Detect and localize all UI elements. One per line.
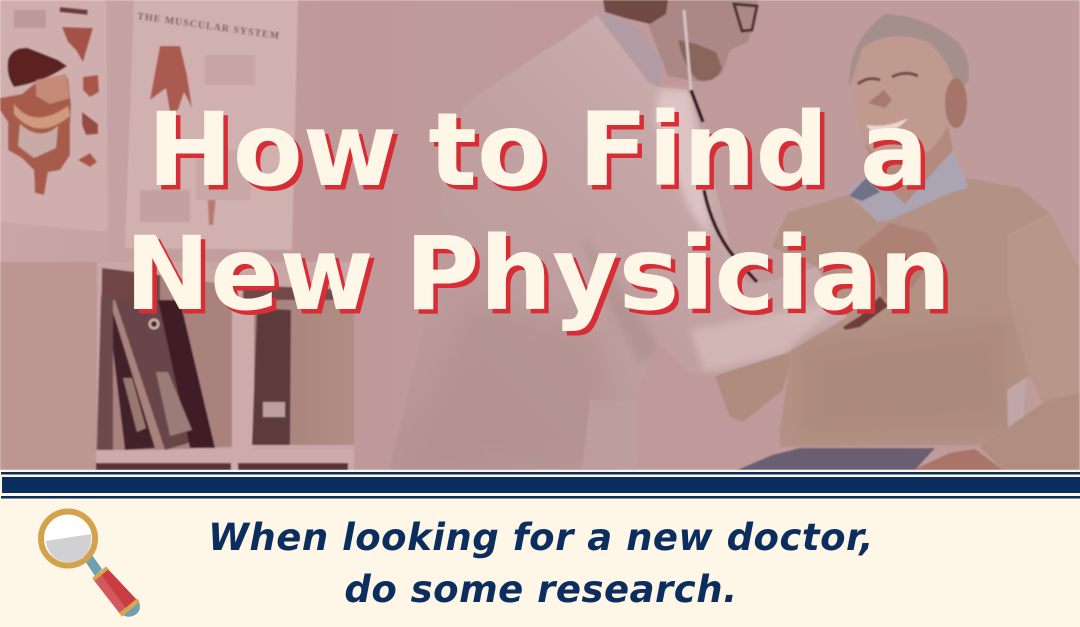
coat pocket <box>582 400 637 470</box>
coat shading <box>410 300 625 470</box>
title shadow <box>129 96 956 338</box>
doctor coat <box>390 15 847 470</box>
patient head <box>852 24 958 162</box>
patient shirt <box>848 150 968 222</box>
title text: How to Find a <box>147 91 929 210</box>
icon: magnifying glass <box>41 512 140 617</box>
patient hand <box>857 223 938 300</box>
patient sweater <box>772 178 1080 447</box>
patient jeans <box>737 448 935 470</box>
bottom panel <box>0 470 1080 627</box>
left cabinet <box>0 262 98 470</box>
poster: muscular system <box>125 0 298 250</box>
doctor face and neck <box>640 0 758 82</box>
stethoscope <box>691 90 757 282</box>
title shadow: How to Find a <box>152 96 933 214</box>
patient hand on knee <box>913 449 1003 470</box>
title text <box>125 91 951 334</box>
patient right sleeve <box>1007 213 1080 400</box>
cream panel background <box>0 470 1080 627</box>
shelf unit <box>96 262 354 470</box>
doctor fingers and watch <box>843 296 888 330</box>
wall <box>0 0 1080 470</box>
sweater shading <box>800 320 1010 435</box>
patient forearm left <box>715 353 790 422</box>
patient ear <box>945 78 967 128</box>
poster: muscular system: THE MUSCULAR SYSTEM <box>137 11 281 42</box>
title text: New Physician <box>125 215 951 334</box>
poster: digestive system <box>0 0 108 232</box>
shirt under arm <box>1007 377 1027 432</box>
background photo: doctor examining patient <box>0 0 1080 470</box>
doctor glasses <box>734 4 757 31</box>
subtitle: When looking for a new doctor, <box>208 516 874 559</box>
subtitle: do some research. <box>344 568 738 611</box>
patient hair <box>849 14 969 92</box>
patient face features <box>858 73 918 84</box>
patient forearm right <box>980 393 1080 470</box>
patient neck <box>865 110 953 204</box>
doctor hair <box>603 0 668 24</box>
triple navy rule <box>1 472 1080 498</box>
title shadow: New Physician <box>129 220 956 338</box>
title <box>125 91 956 338</box>
doctor collar <box>597 14 662 86</box>
doctor beard <box>678 40 722 81</box>
doctor <box>390 0 847 470</box>
patient <box>715 14 1080 470</box>
subtitle <box>208 516 874 611</box>
binders <box>97 295 291 450</box>
